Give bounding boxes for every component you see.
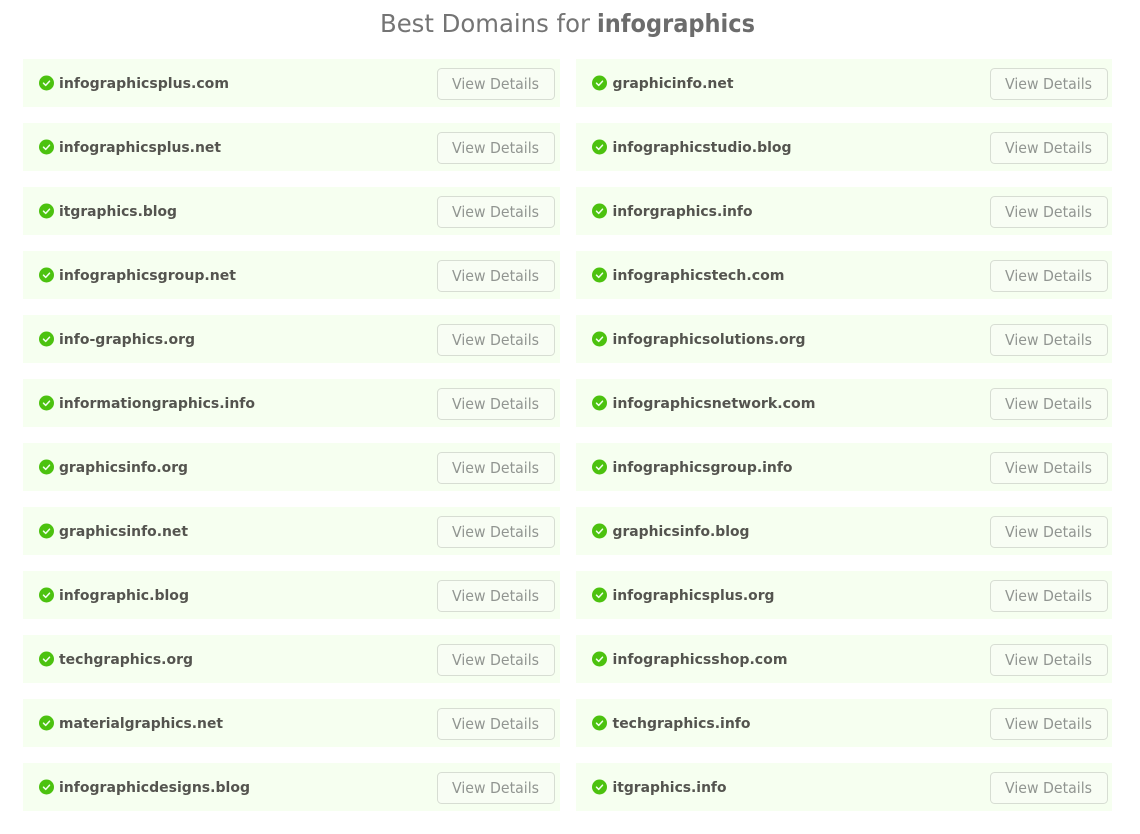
- row: graphicinfo.net: [576, 59, 1112, 107]
- button: view details: View Details: [452, 267, 539, 285]
- button: view details: [438, 324, 554, 356]
- row: inforgraphics.info: [576, 187, 1112, 235]
- row: itgraphics.blog: [23, 187, 560, 235]
- button: view details: [438, 580, 554, 612]
- button: view details: View Details: [452, 587, 539, 605]
- row: graphicsinfo.net: [23, 507, 560, 555]
- button: view details: View Details: [452, 331, 539, 349]
- domain name: inforgraphics.info: [612, 204, 753, 220]
- icon: check: [39, 76, 54, 90]
- button: view details: View Details: [452, 75, 539, 93]
- row: infographicsplus.com: [23, 59, 560, 107]
- button: view details: View Details: [452, 651, 539, 669]
- domain name: infographicdesigns.blog: [59, 780, 250, 796]
- domain name: itgraphics.blog: [59, 204, 177, 220]
- icon: check: [39, 332, 54, 346]
- button: view details: View Details: [452, 459, 539, 477]
- row: techgraphics.info: [576, 699, 1112, 747]
- row: infographicsolutions.org: [576, 315, 1112, 363]
- icon: check: [592, 268, 607, 282]
- row: infographicsplus.net: [23, 123, 560, 171]
- domain name: infographicsolutions.org: [612, 332, 806, 348]
- icon: check: [592, 780, 607, 794]
- icon: check: [39, 588, 54, 602]
- icon: check: [39, 524, 54, 538]
- icon: check: [39, 204, 54, 218]
- button: view details: [438, 708, 554, 740]
- button: view details: [438, 196, 554, 228]
- row: infographicsshop.com: [576, 635, 1112, 683]
- icon: check: [592, 460, 607, 474]
- button: view details: View Details: [452, 395, 539, 413]
- row: techgraphics.org: [23, 635, 560, 683]
- button: view details: View Details: [452, 523, 539, 541]
- row: infographicsnetwork.com: [576, 379, 1112, 427]
- icon: check: [592, 652, 607, 666]
- domain name: graphicinfo.net: [612, 76, 734, 92]
- row: informationgraphics.info: [23, 379, 560, 427]
- icon: check: [592, 140, 607, 154]
- button: view details: [438, 260, 554, 292]
- icon: check: [39, 140, 54, 154]
- button: view details: View Details: [1005, 459, 1092, 477]
- button: view details: [990, 132, 1108, 164]
- button: view details: View Details: [452, 139, 539, 157]
- button: view details: [990, 516, 1108, 548]
- icon: check: [592, 588, 607, 602]
- row: infographicsplus.org: [576, 571, 1112, 619]
- button: view details: View Details: [452, 715, 539, 733]
- row: itgraphics.info: [576, 763, 1112, 811]
- domain name: infographic.blog: [59, 588, 189, 604]
- row: infographicstudio.blog: [576, 123, 1112, 171]
- button: view details: [990, 388, 1108, 420]
- button: view details: [990, 708, 1108, 740]
- icon: check: [39, 716, 54, 730]
- icon: check: [39, 652, 54, 666]
- domain name: infographicsplus.org: [612, 588, 774, 604]
- row: infographic.blog: [23, 571, 560, 619]
- button: view details: [438, 388, 554, 420]
- button: view details: View Details: [1005, 395, 1092, 413]
- domain name: materialgraphics.net: [59, 716, 223, 732]
- button: view details: [990, 452, 1108, 484]
- row: infographicsgroup.info: [576, 443, 1112, 491]
- button: view details: [438, 516, 554, 548]
- row: infographicdesigns.blog: [23, 763, 560, 811]
- button: view details: [438, 772, 554, 804]
- button: view details: View Details: [1005, 203, 1092, 221]
- icon: check: [592, 524, 607, 538]
- row: graphicsinfo.blog: [576, 507, 1112, 555]
- domain name: graphicsinfo.org: [59, 460, 188, 476]
- button: view details: [990, 644, 1108, 676]
- title: Best Domains for: [380, 9, 591, 38]
- icon: check: [592, 332, 607, 346]
- domain name: infographicsshop.com: [612, 652, 788, 668]
- icon: check: [592, 716, 607, 730]
- button: view details: View Details: [452, 779, 539, 797]
- button: view details: View Details: [1005, 267, 1092, 285]
- button: view details: View Details: [452, 203, 539, 221]
- button: view details: [438, 452, 554, 484]
- domain name: infographicsnetwork.com: [612, 396, 816, 412]
- button: view details: View Details: [1005, 587, 1092, 605]
- button: view details: [990, 196, 1108, 228]
- domain name: techgraphics.info: [612, 716, 751, 732]
- button: view details: View Details: [1005, 779, 1092, 797]
- icon: check: [39, 396, 54, 410]
- domain name: infographicsgroup.info: [612, 460, 793, 476]
- button: view details: View Details: [1005, 523, 1092, 541]
- button: view details: [438, 644, 554, 676]
- domain name: info-graphics.org: [59, 332, 195, 348]
- row: graphicsinfo.org: [23, 443, 560, 491]
- button: view details: [990, 772, 1108, 804]
- button: view details: View Details: [1005, 139, 1092, 157]
- domain name: infographicsplus.net: [59, 140, 221, 156]
- button: view details: [438, 132, 554, 164]
- row: materialgraphics.net: [23, 699, 560, 747]
- domain name: graphicsinfo.blog: [612, 524, 750, 540]
- icon: check: [592, 204, 607, 218]
- button: view details: [990, 68, 1108, 100]
- row: infographicsgroup.net: [23, 251, 560, 299]
- domain name: techgraphics.org: [59, 652, 193, 668]
- icon: check: [39, 268, 54, 282]
- button: view details: View Details: [1005, 715, 1092, 733]
- row: infographicstech.com: [576, 251, 1112, 299]
- button: view details: [990, 580, 1108, 612]
- button: view details: [990, 324, 1108, 356]
- domain name: informationgraphics.info: [59, 396, 255, 412]
- row: info-graphics.org: [23, 315, 560, 363]
- button: view details: View Details: [1005, 75, 1092, 93]
- domain name: graphicsinfo.net: [59, 524, 188, 540]
- icon: check: [39, 460, 54, 474]
- button: view details: View Details: [1005, 651, 1092, 669]
- domain name: infographicstech.com: [612, 268, 784, 284]
- button: view details: View Details: [1005, 331, 1092, 349]
- title: infographics: [597, 9, 755, 38]
- icon: check: [592, 396, 607, 410]
- button: view details: [990, 260, 1108, 292]
- icon: check: [39, 780, 54, 794]
- domain name: infographicstudio.blog: [612, 140, 792, 156]
- icon: check: [592, 76, 607, 90]
- domain name: infographicsgroup.net: [59, 268, 236, 284]
- title: [380, 9, 755, 38]
- domain name: infographicsplus.com: [59, 76, 229, 92]
- domain name: itgraphics.info: [612, 780, 727, 796]
- button: view details: [438, 68, 554, 100]
